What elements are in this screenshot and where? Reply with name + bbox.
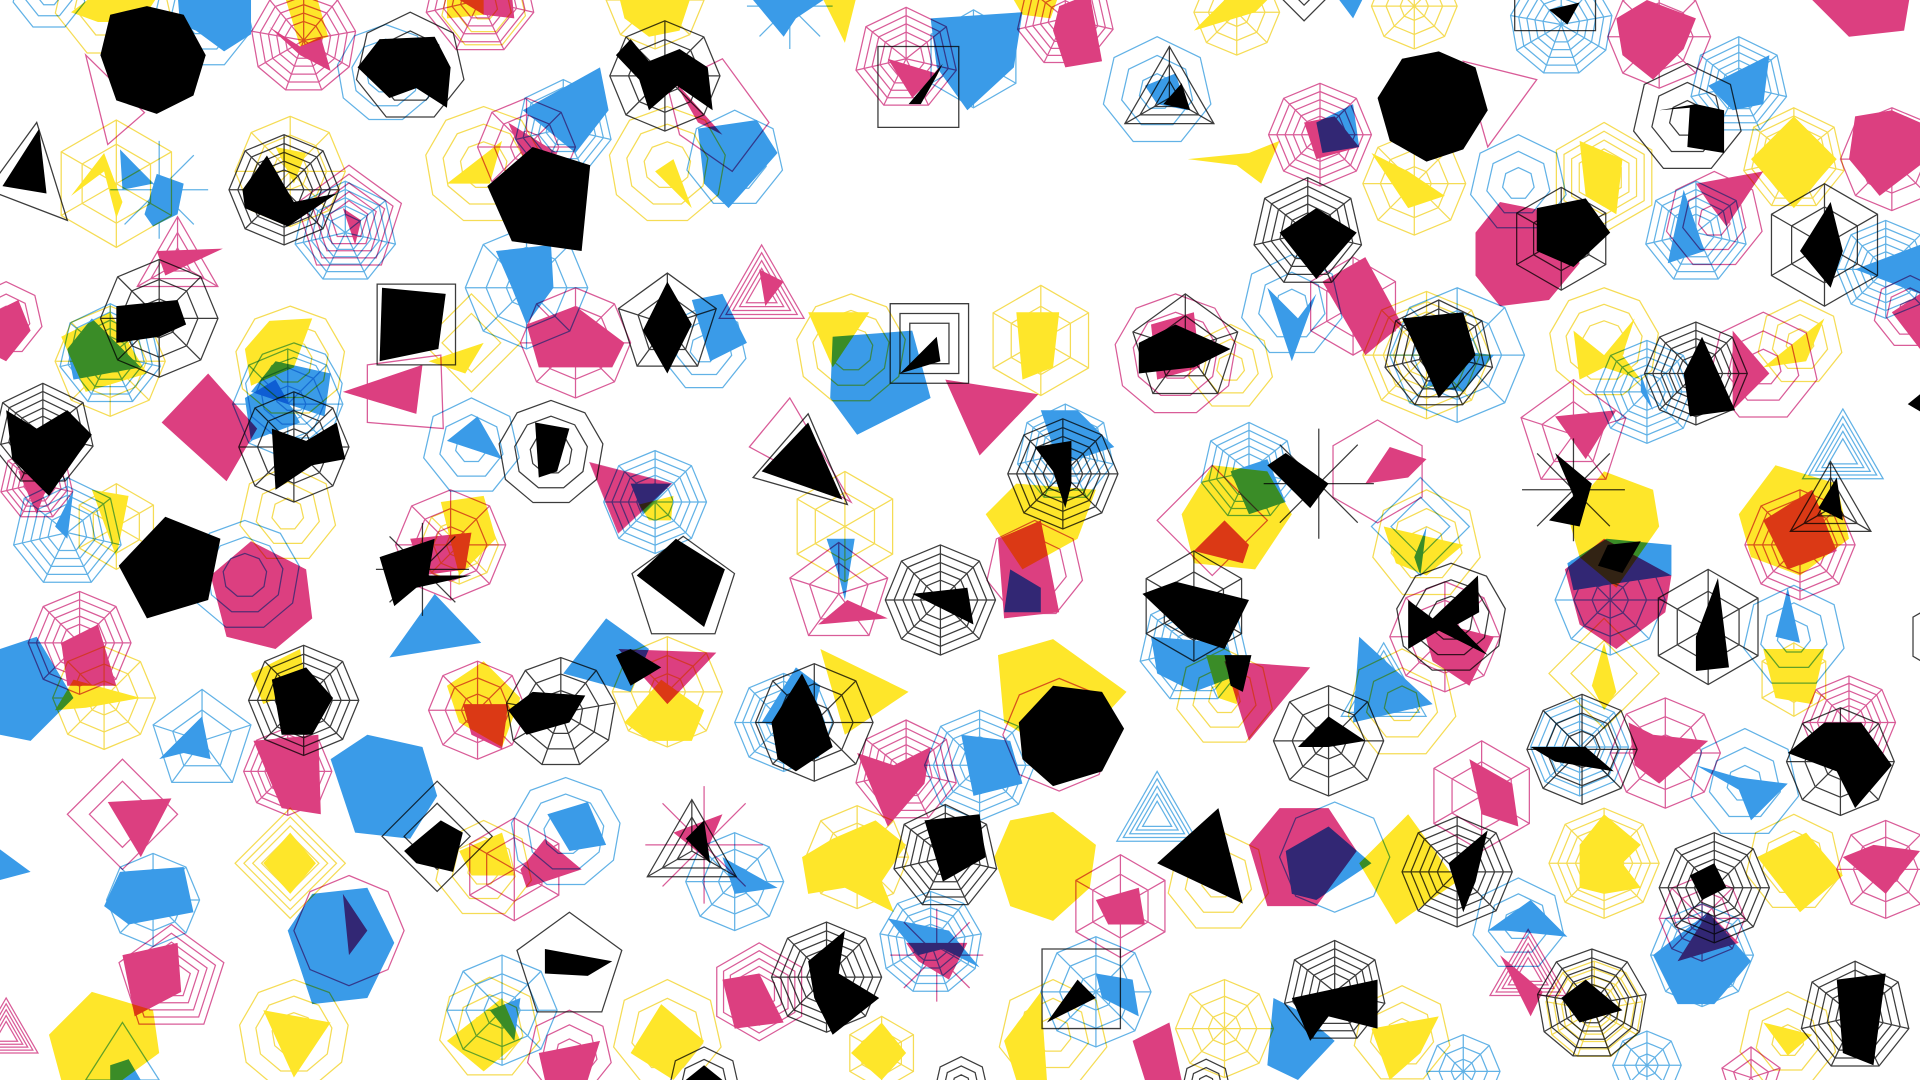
- radar: black square filled: [377, 284, 456, 365]
- radar: cyan triangle: [389, 594, 481, 658]
- radar: yellow bottom octagon: [1176, 980, 1273, 1078]
- radar: yellow behind black: [235, 116, 345, 227]
- radar: cyan top spokes: [747, 0, 833, 49]
- radar: yellow left: [61, 120, 171, 247]
- radar: cyan big left: [0, 637, 73, 741]
- radar: black top square: [1515, 0, 1596, 31]
- radar: magenta hexagon low right: [1434, 741, 1529, 851]
- radar: magenta web lower-left: [396, 490, 506, 600]
- radar: magenta spikes low: [645, 786, 763, 904]
- radar: yellow middle: [797, 294, 905, 401]
- radar: cyan web: [337, 24, 434, 120]
- radar: yellow web top left middle: [236, 306, 344, 413]
- radar: magenta fill far right: [1840, 108, 1920, 211]
- radar: cyan green left: [60, 304, 160, 401]
- radar: magenta kite: [343, 355, 443, 429]
- radar: cyan bottom center right: [1267, 998, 1335, 1080]
- radar: black dense web center right: [1402, 817, 1512, 927]
- radar: yellow wedge right: [1758, 300, 1842, 381]
- radar: cyan navy right: [1555, 539, 1671, 655]
- radar: yellow right low: [1746, 814, 1843, 912]
- radar: black web right: [1787, 708, 1894, 816]
- radar: cyan big circle: [288, 888, 394, 1004]
- radar: black bottom small: [668, 1047, 740, 1080]
- radar: cyan dense triangle: [1803, 409, 1883, 479]
- radar: cyan web right spike: [1744, 585, 1844, 683]
- radar: cyan square center right: [1371, 478, 1469, 576]
- radar: cyan web upper: [516, 67, 611, 173]
- radar: magenta web center left: [520, 288, 631, 398]
- radar: black dense left: [229, 135, 339, 245]
- radar: yellow small fill: [284, 0, 328, 47]
- radar: magenta web center-left low: [429, 661, 527, 759]
- radar: black octagon web center low: [1273, 686, 1384, 796]
- radar: cyan navy center: [1004, 569, 1041, 612]
- radar: cyan outline: [1471, 135, 1566, 228]
- radar: cyan pentagon left: [153, 689, 251, 782]
- radar: yellow fill right: [1567, 471, 1659, 588]
- radar: black triangle low: [647, 800, 736, 877]
- radar: magenta arrow center-left: [618, 649, 716, 704]
- radar: black right edge small: [1908, 394, 1920, 411]
- radar: cyan dense center top: [1201, 422, 1297, 516]
- radar: yellow web center: [1363, 132, 1466, 235]
- radar: magenta pentagon center: [1333, 420, 1427, 523]
- radar: black dense left edge: [0, 383, 93, 496]
- radar: black dense center: [1254, 178, 1361, 282]
- radar: black triangle far right: [1790, 462, 1871, 531]
- radar: cyan fill left: [233, 349, 343, 459]
- radar: yellow web center right: [1373, 490, 1480, 595]
- radar: magenta dense left low: [244, 727, 332, 816]
- radar: yellow hexagon center: [797, 471, 893, 582]
- radar: black dense bottom right: [1285, 940, 1385, 1041]
- radar: yellow wedge center: [820, 649, 909, 735]
- radar: black top edge: [1265, 0, 1343, 21]
- radar: yellow X: [1550, 288, 1658, 395]
- radar: cyan heptagon: [1103, 37, 1211, 141]
- radar: magenta dense far right: [1745, 490, 1855, 600]
- radar: magenta triangle left: [137, 217, 223, 287]
- radar: black triangle left: [0, 122, 67, 220]
- radar: yellow web center low: [1177, 649, 1272, 742]
- radar: magenta spikes bottom: [890, 909, 983, 1002]
- radar: cyan spokes left: [110, 141, 208, 239]
- radar: cyan dense triangle center right: [1341, 637, 1433, 722]
- radar: magenta heptagon fill: [211, 541, 312, 649]
- radar: cyan bottom right: [1427, 1035, 1500, 1080]
- radar: yellow cross: [1188, 141, 1280, 184]
- radar: black nonagon: [499, 400, 603, 503]
- radar: yellow lower-left: [420, 496, 498, 584]
- radar: yellow right spike: [1762, 643, 1826, 716]
- radar: black dense right: [1644, 322, 1747, 425]
- radar: black concentric square: [890, 304, 969, 383]
- radar: yellow low center: [436, 820, 531, 914]
- radar: magenta outline center low: [790, 542, 888, 635]
- radar: magenta low center: [470, 818, 582, 921]
- radar: black triangle: [1125, 47, 1214, 124]
- radar: magenta large right: [1565, 539, 1671, 649]
- radar: magenta with square: [856, 7, 956, 105]
- radar: magenta triangle center-left: [590, 463, 671, 533]
- radar: magenta top: [426, 0, 534, 50]
- radar: magenta outline center low: [1003, 678, 1116, 791]
- radar: black concentric: [100, 260, 218, 377]
- radar: black web center: [885, 545, 996, 655]
- radar: magenta dense low left: [119, 924, 224, 1024]
- radar: cyan web low: [447, 955, 557, 1065]
- radar: black web center low: [756, 664, 873, 781]
- radar: cyan dense triangle center: [1117, 771, 1197, 841]
- radar: yellow web low: [440, 977, 540, 1075]
- radar: magenta web upper: [478, 98, 576, 196]
- radar: yellow dense hexagon: [1556, 122, 1652, 233]
- radar: cyan arrow center: [1242, 255, 1342, 361]
- radar: black pentagon outline: [632, 536, 735, 634]
- radar: magenta left edge: [0, 282, 42, 361]
- radar: cyan outline center-left: [424, 398, 519, 491]
- radar: cyan octagon low: [686, 833, 784, 931]
- radar: yellow outline center: [1189, 324, 1272, 406]
- radar: yellow small top: [1010, 0, 1059, 18]
- radar: cyan dense low right: [1651, 904, 1753, 1007]
- radar: yellow octagon fill: [994, 812, 1096, 921]
- radar: cyan top edge: [1335, 0, 1365, 18]
- radar: cyan outline center left: [465, 227, 588, 349]
- radar: cyan small overlap: [1316, 104, 1359, 153]
- radar: cyan big fill: [331, 735, 437, 839]
- radar: magenta dense left edge: [1, 447, 73, 517]
- radar: black small center-left: [616, 649, 661, 686]
- radar: magenta pentagon fill: [162, 373, 257, 481]
- radar: magenta small right: [1667, 171, 1763, 265]
- radar: black solid triangle: [1157, 808, 1243, 904]
- radar: cyan dense bottom: [880, 891, 981, 991]
- radar: yellow bottom center: [614, 980, 721, 1080]
- radar: black dense bottom far right: [1801, 961, 1909, 1066]
- radar: cyan large middle: [830, 331, 931, 435]
- radar: yellow bottom center right: [850, 1016, 913, 1080]
- radar: yellow dense bottom: [1546, 961, 1643, 1056]
- radar: cyan web bottom center: [1041, 937, 1151, 1047]
- radar: yellow web left low: [53, 647, 156, 749]
- radar: yellow far right: [1739, 465, 1849, 576]
- radar: yellow bottom left: [49, 992, 159, 1080]
- radar: black octagon center right: [1378, 51, 1488, 162]
- radar: yellow dense center: [1363, 291, 1490, 419]
- radar: magenta square center: [1157, 465, 1267, 576]
- radar: cyan web upper right: [1691, 37, 1787, 130]
- radar: magenta wedge right: [1710, 312, 1817, 417]
- radar: black bottom center right: [1182, 1059, 1230, 1080]
- radar: cyan dense center top: [1018, 404, 1114, 497]
- radar: black dense right mid: [1527, 694, 1637, 804]
- radar: yellow green left: [55, 306, 165, 416]
- radar: cyan navy center right: [1280, 802, 1390, 912]
- radar: magenta web center top: [1269, 83, 1371, 186]
- radar: yellow square web: [422, 294, 520, 392]
- radar: cyan nonagon low: [511, 778, 620, 884]
- radar: black square: [878, 47, 959, 127]
- radar: magenta web left low: [28, 591, 131, 694]
- radar: black heptagon: [356, 12, 464, 117]
- radar: black pentagon left: [119, 517, 220, 618]
- radar: black square low: [382, 781, 492, 891]
- radar: cyan pentagon fill: [687, 110, 782, 208]
- radar: magenta corner top right: [1812, 0, 1910, 37]
- radar: yellow web: [609, 107, 725, 221]
- radar: black right edge: [1913, 598, 1920, 676]
- radar: yellow center fill: [986, 484, 1096, 569]
- radar: cyan wedge center-left: [563, 618, 649, 692]
- radar: magenta bottom fill: [528, 1010, 611, 1080]
- radar: yellow near triangle: [1168, 830, 1269, 928]
- radar: yellow left mid: [79, 484, 153, 569]
- radar: cyan center low web: [735, 667, 833, 771]
- radar: black hexagon far right: [1771, 184, 1878, 306]
- radar: magenta far right: [1874, 276, 1920, 349]
- radar: magenta kite left: [67, 759, 178, 869]
- radar: yellow outline left: [240, 465, 336, 558]
- radar: yellow center big: [1182, 465, 1292, 569]
- radar: cyan web right: [1691, 729, 1799, 833]
- radar: magenta dense right: [1802, 676, 1896, 769]
- radar: cyan web right mid: [1531, 698, 1629, 796]
- radar: cyan dense center low right: [1140, 594, 1248, 699]
- radar: black hexagon right center: [1658, 569, 1758, 684]
- radar: yellow star center: [802, 806, 909, 912]
- radar: magenta bottom far right: [1722, 1047, 1780, 1080]
- radar: black square bottom: [1042, 949, 1120, 1029]
- radar: black bow: [1133, 294, 1238, 394]
- radar: magenta dense triangle bottom: [1490, 929, 1566, 1016]
- radar: black pentagon: [487, 147, 590, 251]
- radar: cyan dense center: [1390, 288, 1524, 422]
- radar: yellow top overlap: [442, 0, 525, 45]
- radar: cyan top-left: [13, 0, 85, 27]
- radar: yellow diamond right: [1549, 618, 1659, 729]
- radar: cyan dense far right: [1837, 220, 1920, 318]
- radar: cyan dense right low: [1596, 340, 1698, 443]
- radar: black wedge center low: [1224, 655, 1251, 692]
- radar: black dense right low: [1659, 833, 1769, 943]
- radar: magenta dense small: [297, 165, 401, 265]
- radar: cyan web middle: [246, 343, 342, 438]
- radar: magenta top right: [1608, 0, 1711, 88]
- radar: magenta dense bottom: [717, 943, 802, 1041]
- radar: cyan dense left: [14, 478, 121, 582]
- radar: cyan top: [152, 0, 252, 65]
- radar: yellow diamond: [235, 808, 345, 918]
- radar: cyan fill: [662, 294, 747, 388]
- radar: yellow web right: [1744, 108, 1844, 208]
- radar: yellow web bottom center: [999, 980, 1107, 1080]
- radar: black octagon: [100, 6, 206, 114]
- radar: magenta right low: [1837, 820, 1920, 918]
- radar: black star: [610, 21, 720, 131]
- radar: black hex center low right: [1142, 551, 1249, 661]
- radar: yellow top edge: [1371, 0, 1457, 49]
- radar: yellow bottom far right: [1740, 992, 1836, 1080]
- radar: yellow center-left low: [447, 661, 520, 747]
- radar: black pentagon low: [517, 912, 622, 1012]
- radar: magenta outline triangle: [1463, 61, 1537, 147]
- radar: magenta center right: [1115, 294, 1236, 413]
- radar: yellow top center: [606, 0, 704, 49]
- radar: yellow hexagon middle: [993, 285, 1089, 396]
- radar: magenta web right: [1610, 698, 1720, 808]
- radar: yellow web center right low: [1348, 649, 1456, 754]
- radar: magenta web near triangle: [1076, 855, 1165, 958]
- radar: magenta octagon low: [294, 876, 404, 986]
- radar: yellow bottom right: [1354, 986, 1450, 1080]
- radar: cyan dense center-left: [604, 451, 707, 553]
- radar: black spikes right: [1522, 438, 1625, 541]
- radar: magenta outline triangle center: [749, 398, 851, 502]
- radar: black dense center right: [1385, 300, 1492, 405]
- radar: magenta large fill: [1476, 202, 1580, 306]
- radar: cyan fill low left: [104, 853, 200, 947]
- radar: black web bottom: [771, 922, 882, 1035]
- radar: black web left low: [249, 645, 359, 756]
- radar: cyan bottom mid right: [1613, 1031, 1681, 1080]
- radar: magenta web right center: [1390, 582, 1500, 692]
- radar: magenta triangle middle: [945, 380, 1038, 456]
- radar: black small right: [1598, 541, 1641, 573]
- radar: magenta right top: [1018, 0, 1113, 67]
- radar: cyan small green bottom: [86, 1022, 159, 1080]
- radar: yellow small green: [639, 496, 673, 520]
- radar: magenta outline upper: [667, 59, 769, 171]
- radar: magenta bottom left: [0, 998, 38, 1053]
- radar: magenta dense triangle: [719, 245, 804, 318]
- radar: cyan triangle left edge: [0, 845, 31, 882]
- radar: black web left: [239, 392, 349, 502]
- radar: magenta low right: [1659, 876, 1745, 961]
- radar: magenta outline right: [1521, 380, 1626, 479]
- radar: black bottom edge: [935, 1057, 987, 1080]
- radar: cyan dense center low: [924, 710, 1035, 820]
- radar: yellow web center-left: [612, 637, 722, 747]
- radar: magenta kite center: [1311, 257, 1402, 355]
- radar: magenta dense web: [252, 0, 356, 90]
- radar: magenta center tall: [987, 520, 1082, 618]
- radar: yellow big center low: [998, 639, 1127, 759]
- radar: black heptagon upper right: [1634, 64, 1741, 168]
- radar: yellow top fill: [820, 0, 857, 43]
- radar: yellow web upper: [426, 107, 542, 221]
- radar: yellow bottom web: [240, 980, 348, 1080]
- radar: magenta web center: [856, 720, 956, 827]
- radar: black hexagon right: [1517, 187, 1610, 290]
- radar: cyan arrow center right: [1473, 878, 1567, 966]
- radar: cyan dense: [295, 181, 395, 279]
- radar: cyan dense top right: [1511, 0, 1612, 73]
- radar: yellow top right: [1194, 0, 1280, 55]
- radar: magenta bottom center right: [1133, 1022, 1182, 1080]
- radar: cyan dense right: [1646, 181, 1746, 279]
- radar: magenta fill center right low: [1249, 808, 1357, 906]
- radar: yellow dense right low: [1549, 808, 1659, 918]
- radar: magenta outline: [86, 55, 144, 144]
- radar: yellow fill left: [251, 649, 306, 704]
- radar: black dense nonagon bottom: [1538, 949, 1646, 1056]
- radar: black spikes lower-left: [376, 523, 471, 616]
- radar: black bird right center: [1397, 563, 1505, 670]
- radar: cyan outline left low: [191, 520, 299, 627]
- radar: black dense spider: [1008, 419, 1118, 529]
- radar: magenta triangle center low: [1224, 661, 1310, 741]
- radar: yellow top-left: [55, 0, 170, 53]
- radar: cyan fill top: [931, 10, 1022, 110]
- radar: cyan narrow center: [827, 539, 855, 600]
- radar: black octagon center low: [1019, 686, 1124, 786]
- radar: black dense nonagon: [507, 658, 615, 764]
- radar: black triangle center: [753, 414, 847, 504]
- radar: black diamond: [618, 273, 716, 373]
- radar: black spikes center: [1264, 429, 1374, 539]
- radar: yellow diamond center right: [1359, 814, 1457, 924]
- radar: black dense center low: [894, 804, 997, 905]
